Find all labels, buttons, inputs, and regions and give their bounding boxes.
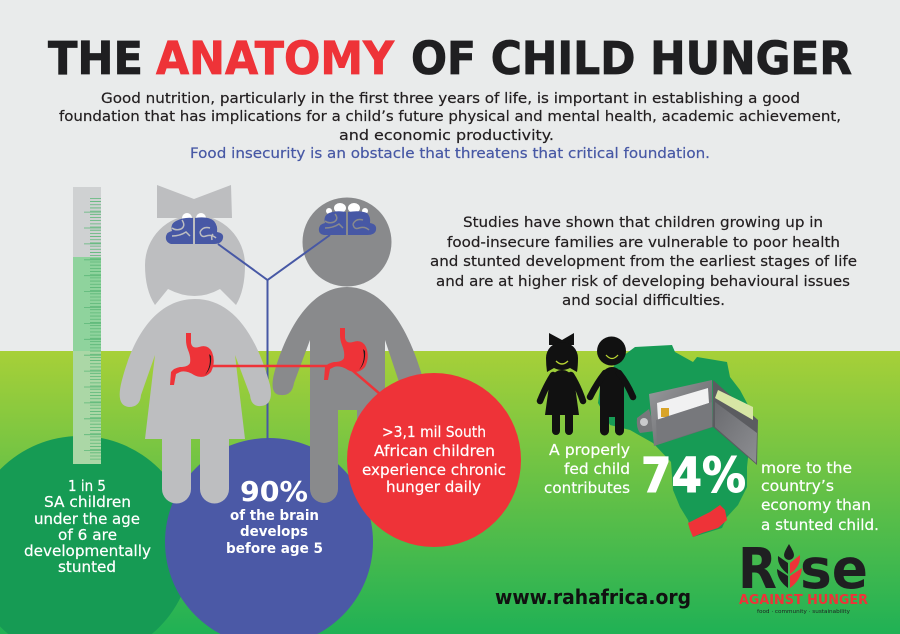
icon: girl stomach: [170, 333, 214, 385]
icon: small boy: [590, 336, 633, 436]
intro text: Food insecurity is an obstacle that threatens that critical foundation.: [190, 146, 710, 162]
background: grass: [0, 351, 900, 634]
intro text: [59, 91, 841, 162]
background: sky: [0, 0, 900, 352]
map: Africa: [598, 345, 750, 537]
text: properly fed child: [544, 441, 630, 497]
figure: boy: [273, 198, 423, 503]
figure: girl: [120, 185, 271, 503]
connector: blue stem: [266, 280, 268, 440]
text: properly fed child: fed child: [564, 460, 630, 478]
text: green circle: stunted: [58, 558, 116, 576]
logo: se: [800, 537, 868, 601]
website: www.rahafrica.org: [495, 585, 691, 609]
icon: small girl smile: [556, 361, 568, 364]
icon: boy brain: [319, 203, 376, 235]
circle: red hunger: [347, 373, 521, 547]
icon: small boy smile: [606, 355, 618, 358]
studies paragraph: and social difficulties.: [562, 293, 725, 309]
icon: wallet: [637, 380, 758, 465]
studies paragraph: food-insecure families are vulnerable to poor health: [447, 235, 840, 251]
text: more to the economy: economy than: [761, 496, 871, 514]
text: blue circle: of the brain: [230, 508, 319, 524]
text: red circle: >3,1 mil South: [382, 423, 486, 441]
intro text: foundation that has implications for a child’s future physical and mental health, academic achievement,: [59, 109, 841, 125]
logo: [738, 537, 868, 615]
text: more to the economy: country’s: [761, 477, 834, 495]
connector: brain lines: [218, 235, 330, 280]
text: more to the economy: a stunted child.: [761, 516, 879, 534]
circle: green stunted: [0, 436, 192, 634]
text: properly fed child: contributes: [544, 479, 630, 497]
text: red circle: [362, 423, 506, 496]
title: [48, 32, 852, 85]
studies paragraph: and stunted development from the earliest stages of life: [430, 254, 857, 270]
icon: girl brain: [166, 213, 223, 244]
circle: blue brain: [165, 438, 373, 634]
logo: food · community · sustainability: [757, 609, 851, 615]
text: red circle: experience chronic: [362, 461, 506, 479]
text: blue circle: before age 5: [226, 541, 323, 557]
studies paragraph: and are at higher risk of developing behavioural issues: [436, 274, 850, 290]
stat: 74%: 74%: [641, 448, 746, 504]
text: green circle: SA children: [44, 493, 131, 511]
text: green circle: developmentally: [24, 542, 151, 560]
icon: boy stomach: [324, 328, 368, 380]
studies paragraph: [430, 215, 857, 309]
title: THE: [48, 32, 143, 85]
title: OF CHILD HUNGER: [411, 32, 852, 85]
logo: AGAINST HUNGER: [739, 593, 868, 608]
text: more to the economy: more to the: [761, 459, 852, 477]
text: green circle: under the age: [34, 510, 140, 528]
text: red circle: African children: [374, 442, 495, 460]
text: blue circle: 90%: [240, 475, 308, 508]
text: more to the economy: [761, 459, 879, 534]
title: ANATOMY: [156, 32, 395, 85]
icon: small girl: [540, 333, 583, 435]
text: green circle: 1 in 5: [68, 477, 106, 495]
intro text: and economic productivity.: [339, 128, 554, 144]
connector: stomach lines: [210, 366, 380, 394]
logo: R: [738, 537, 777, 602]
text: blue circle: [226, 475, 323, 557]
studies paragraph: Studies have shown that children growing up in: [463, 215, 823, 231]
text: red circle: hunger daily: [386, 478, 481, 496]
text: blue circle: develops: [240, 524, 308, 540]
map: South Africa: [688, 505, 727, 537]
text: properly fed child: A properly: [549, 441, 630, 459]
text: green circle: [24, 477, 151, 576]
text: green circle: of 6 are: [58, 526, 117, 544]
intro text: Good nutrition, particularly in the first three years of life, is important in establishing a good: [101, 91, 800, 107]
icon: wheat: [777, 544, 802, 588]
ruler: [73, 187, 101, 464]
